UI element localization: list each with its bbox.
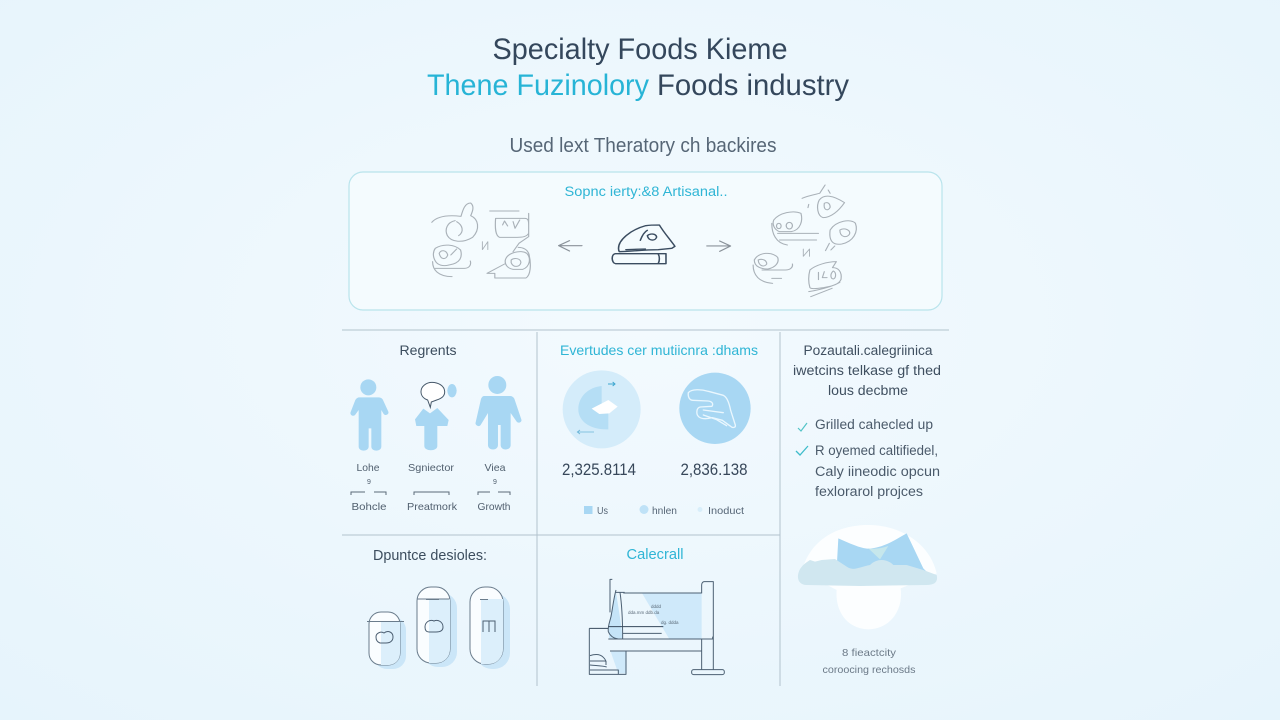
icon: person middle with bubble <box>415 382 457 450</box>
chart: donut <box>563 370 641 448</box>
diagram small text <box>628 604 679 625</box>
title: Thene Fuzinolory <box>427 69 649 102</box>
description: iwetcins telkase gf thed <box>793 363 941 378</box>
caption: coroocing rechosds <box>822 664 916 676</box>
icon: middle jar <box>417 587 457 667</box>
caption <box>822 647 916 676</box>
icon: person right <box>475 376 521 449</box>
icon: right jar <box>470 587 510 669</box>
panel heading: Sopnc ierty:&8 Artisanal.. <box>564 184 728 199</box>
values <box>562 461 748 479</box>
labels: people: 9 <box>367 479 371 486</box>
values: 2,325.8114 <box>562 461 636 479</box>
check list: fexlorarol projces <box>815 484 923 499</box>
icon: central cap on book <box>612 225 675 264</box>
icon: person left <box>350 379 388 451</box>
check list: Grilled cahecled up <box>815 417 933 432</box>
panel: regrents <box>350 342 521 513</box>
labels: people: Growth <box>478 501 511 513</box>
panel: right column <box>793 343 941 676</box>
labels: people: Bohcle <box>352 501 387 513</box>
legend: Us <box>597 505 608 517</box>
brackets <box>351 492 510 495</box>
panel: specialty and artisanal <box>349 172 942 310</box>
diagram small text: dddd <box>651 604 662 609</box>
panel: charts <box>560 342 758 517</box>
caption: 8 fieactcity <box>842 647 897 659</box>
panel: dpuntce desioles <box>367 547 510 669</box>
icon: mountain cloud badge <box>798 525 937 629</box>
legend: hnlen <box>652 505 677 517</box>
diagram: counter machine <box>589 579 724 675</box>
labels: people <box>352 462 511 513</box>
labels: people: Sgniector <box>408 462 455 474</box>
diagram small text: dg. ddda <box>661 620 679 625</box>
heading: regrents: Regrents <box>400 342 456 358</box>
chart: filled circle with icon <box>679 373 751 444</box>
arrow: left <box>559 241 582 251</box>
labels: people: Preatmork <box>407 501 458 513</box>
description: Pozautali.calegriinica <box>804 343 933 358</box>
heading: charts: Evertudes cer mutiicnra :dhams <box>560 342 758 358</box>
icon: left doodles <box>432 203 530 278</box>
check list: R oyemed caltifiedel, <box>815 443 938 458</box>
heading: dpuntce desioles: Dpuntce desioles: <box>373 547 487 564</box>
labels: people: Viea <box>484 462 506 474</box>
icon: right doodles <box>753 185 856 297</box>
title: Foods industry <box>657 69 849 102</box>
title <box>427 33 849 102</box>
diagram small text: dda.mm ddb.da <box>628 610 660 615</box>
panel: calecrall <box>589 547 724 675</box>
labels: people: Lohe <box>356 462 380 474</box>
check list: Caly iineodic opcun <box>815 464 940 479</box>
labels: people: 9 <box>493 479 497 486</box>
description <box>793 343 941 398</box>
title: Specialty Foods Kieme <box>492 33 788 66</box>
arrow: right <box>707 241 731 251</box>
description: lous decbme <box>828 383 908 398</box>
check list <box>796 417 940 499</box>
legend <box>584 505 744 517</box>
values: 2,836.138 <box>680 461 748 479</box>
heading: calecrall: Calecrall <box>626 547 684 563</box>
legend: Inoduct <box>708 505 744 517</box>
icon: small jar <box>367 612 406 669</box>
subtitle: Used lext Theratory ch backires <box>510 134 776 157</box>
